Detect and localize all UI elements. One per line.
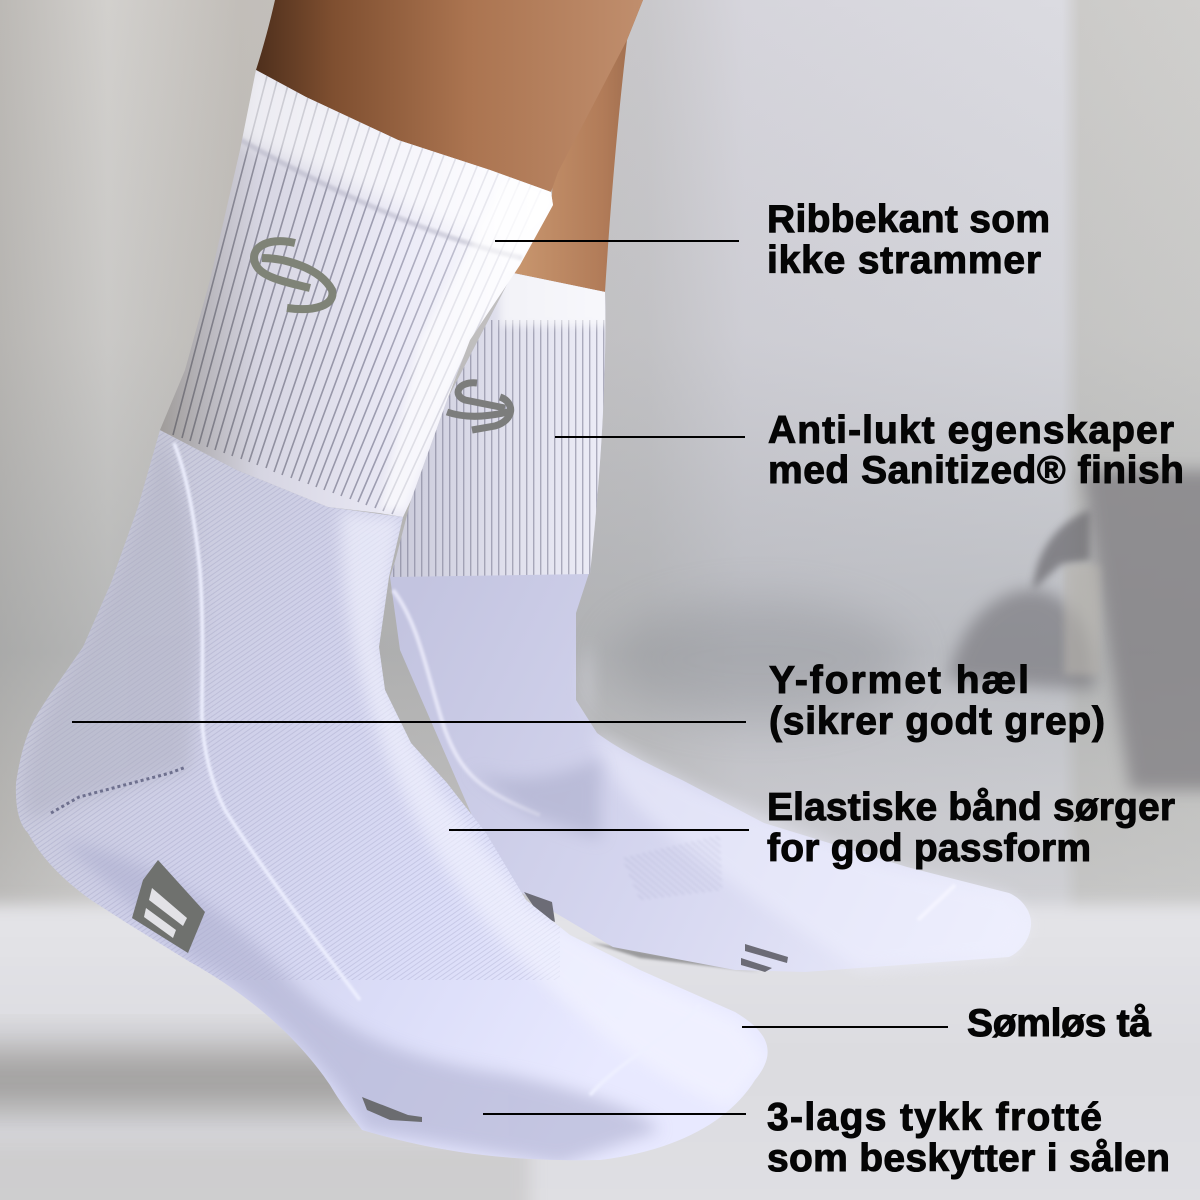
Y-heel seams: front sock (174, 443, 700, 1095)
ribbed cuff: back sock (393, 273, 606, 577)
heel shading: back sock (470, 760, 600, 840)
sock: back foot (380, 270, 1031, 972)
sole terry shade (60, 840, 660, 1165)
logo: front sock (254, 241, 332, 309)
callout: ribbed edge (495, 198, 1050, 282)
callout: terry sole: som beskytter i sålen (767, 1137, 1170, 1180)
grey sole mark: front sock (362, 1097, 422, 1122)
photo: front leg skin (256, 0, 643, 192)
logo: back sock (447, 383, 511, 430)
callout: terry sole (483, 1096, 1170, 1180)
toe seam: back sock (918, 885, 955, 920)
callout: terry sole: 3-lags tykk frotté (767, 1096, 1102, 1139)
elastic band: back sock (622, 835, 722, 900)
light ankle side (336, 510, 642, 1028)
sock: front foot (0, 60, 770, 1165)
callout: Y-shaped heel (72, 659, 1105, 743)
photo: back leg skin (513, 0, 643, 292)
callout: elastic bands: Elastiske bånd sørger (767, 786, 1175, 829)
terry ladder stitch (51, 767, 186, 813)
ribbed cuff: front sock (160, 70, 553, 517)
grey E mark: front sock (132, 860, 205, 953)
heel shade (24, 430, 200, 820)
callout: elastic bands (449, 786, 1175, 870)
callout: anti-odour: med Sanitized® finish (768, 449, 1184, 492)
callout: anti-odour: Anti-lukt egenskaper (768, 409, 1174, 452)
callout: ribbed edge: ikke strammer (767, 239, 1041, 282)
callout: ribbed edge: Ribbekant som (767, 198, 1050, 241)
callout: seamless toe: Sømløs tå (967, 1002, 1151, 1045)
grey marks: back sock (524, 892, 788, 972)
foot knit texture (0, 420, 560, 980)
callout: Y-shaped heel: Y-formet hæl (769, 659, 1029, 702)
callout: elastic bands: for god passform (767, 827, 1091, 870)
callout: anti-odour (555, 409, 1184, 492)
heel seam: back sock (393, 590, 540, 815)
callout: Y-shaped heel: (sikrer godt grep) (769, 700, 1105, 743)
